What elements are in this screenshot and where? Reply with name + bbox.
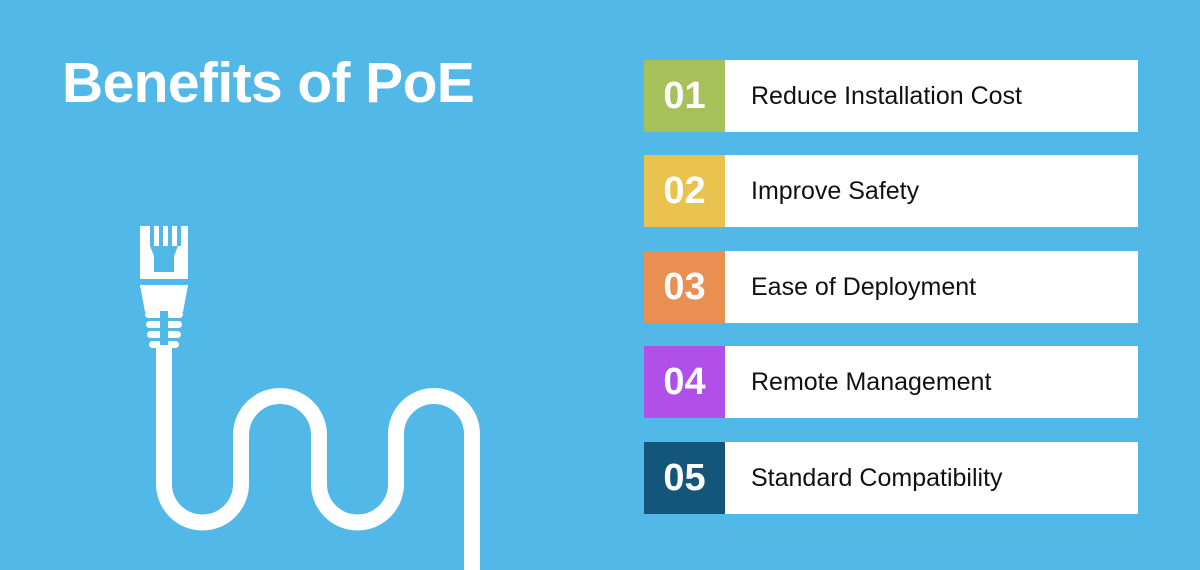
item 03: 03 [663,266,706,308]
item 03 [644,251,1138,323]
item 02: Improve Safety [751,177,919,205]
item 05: 05 [663,456,706,498]
item 01: Reduce Installation Cost [751,82,1022,110]
item 05: Standard Compatibility [751,464,1003,492]
icon: ethernet cable [140,226,480,570]
item 03: Ease of Deployment [751,273,976,301]
item 02: 02 [663,170,706,212]
item 05 [644,442,1138,514]
item 01 [644,60,1138,132]
item 04: 04 [663,360,706,402]
item 04 [644,346,1138,418]
item 02 [644,155,1138,227]
title: Benefits of PoE [62,51,474,115]
item 04: Remote Management [751,368,991,396]
item 01: 01 [663,74,706,116]
